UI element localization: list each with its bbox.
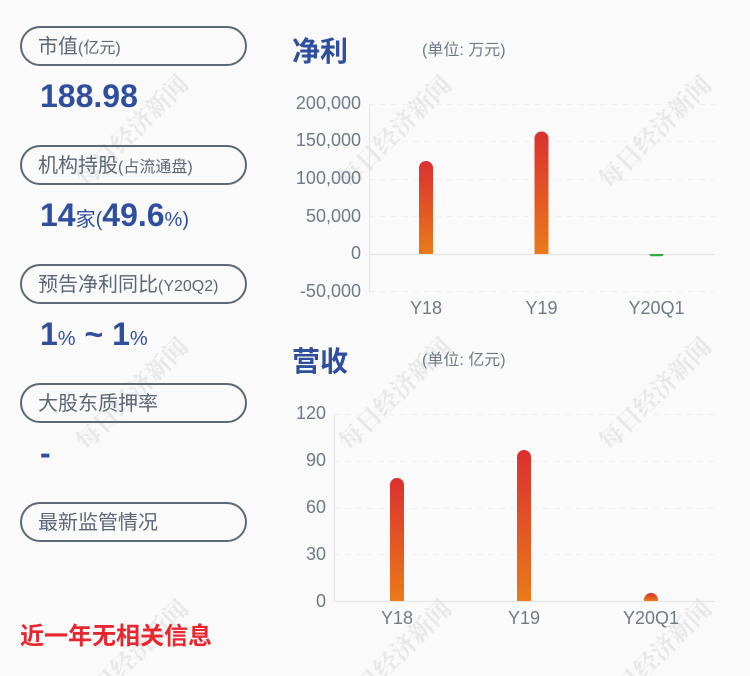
pill label: latest regulation: 最新监管情况 bbox=[38, 511, 158, 534]
pill label: forecast net profit bbox=[21, 265, 246, 303]
pill label: latest regulation bbox=[21, 503, 246, 541]
watermarks: 每日经济新闻 bbox=[333, 70, 457, 194]
bar: Y20Q1 bbox=[644, 593, 658, 601]
value: market cap: 188.98 bbox=[40, 78, 138, 114]
pill label: forecast net profit: 预告净利同比(Y20Q2) bbox=[38, 273, 218, 296]
pill label: institutional holdings: 机构持股(占流通盘) bbox=[38, 154, 193, 177]
heading: net profit: 净利 bbox=[292, 36, 348, 67]
chart: net profit bbox=[296, 93, 715, 318]
bar: Y18 bbox=[390, 478, 404, 601]
chart: revenue: 60 bbox=[306, 497, 326, 517]
chart: net profit: 150,000 bbox=[296, 130, 361, 150]
panel: pledge ratio bbox=[21, 384, 246, 471]
pill label: pledge ratio: 大股东质押率 bbox=[38, 392, 158, 415]
heading: revenue: 营收 bbox=[292, 346, 348, 377]
note: no related info: 近一年无相关信息 bbox=[20, 623, 212, 650]
heading: net profit: (单位: 万元) bbox=[422, 41, 506, 59]
value: institutional holdings: 14家(49.6%) bbox=[40, 197, 189, 233]
pill label: market cap bbox=[21, 27, 246, 65]
value: forecast net profit: 1% ~ 1% bbox=[40, 316, 148, 352]
pill label: institutional holdings bbox=[21, 146, 246, 184]
value: pledge ratio: - bbox=[40, 435, 51, 471]
panel: institutional holdings bbox=[21, 146, 246, 233]
pill label: market cap: 市值(亿元) bbox=[38, 35, 121, 58]
bar: Y19 bbox=[534, 132, 548, 254]
chart: net profit: 200,000 bbox=[296, 93, 361, 113]
heading: revenue: (单位: 亿元) bbox=[422, 351, 506, 369]
chart: net profit: 100,000 bbox=[296, 168, 361, 188]
chart: net profit: Y19 bbox=[525, 298, 558, 318]
chart: net profit: Y18 bbox=[410, 298, 442, 318]
bar: Y19 bbox=[517, 450, 531, 601]
bar: Y18 bbox=[419, 161, 433, 254]
heading: net profit bbox=[292, 36, 506, 67]
chart: revenue: 30 bbox=[306, 544, 326, 564]
chart: revenue: Y18 bbox=[381, 608, 413, 628]
chart: net profit: 0 bbox=[351, 243, 361, 263]
watermarks bbox=[70, 69, 717, 676]
pill label: pledge ratio bbox=[21, 384, 246, 422]
watermarks: 每日经济新闻 bbox=[593, 70, 717, 194]
chart: net profit: Y20Q1 bbox=[628, 298, 685, 318]
chart: revenue: 90 bbox=[306, 450, 326, 470]
chart: revenue: 0 bbox=[316, 591, 326, 611]
watermarks: 每日经济新闻 bbox=[70, 69, 194, 193]
watermarks: 每日经济新闻 bbox=[70, 332, 194, 456]
chart: net profit: 50,000 bbox=[306, 206, 361, 226]
heading: revenue bbox=[292, 346, 506, 377]
watermarks: 每日经济新闻 bbox=[593, 332, 717, 456]
chart: revenue bbox=[296, 403, 715, 628]
panel: forecast net profit bbox=[21, 265, 246, 352]
panel: market cap bbox=[21, 27, 246, 114]
chart: revenue: Y19 bbox=[508, 608, 540, 628]
bar: Y20Q1 bbox=[650, 254, 664, 256]
chart: revenue: 120 bbox=[296, 403, 326, 423]
panel: latest regulation bbox=[20, 503, 246, 650]
chart: net profit: -50,000 bbox=[300, 281, 361, 301]
watermarks: 每日经济新闻 bbox=[333, 332, 457, 456]
chart: revenue: Y20Q1 bbox=[623, 608, 679, 628]
